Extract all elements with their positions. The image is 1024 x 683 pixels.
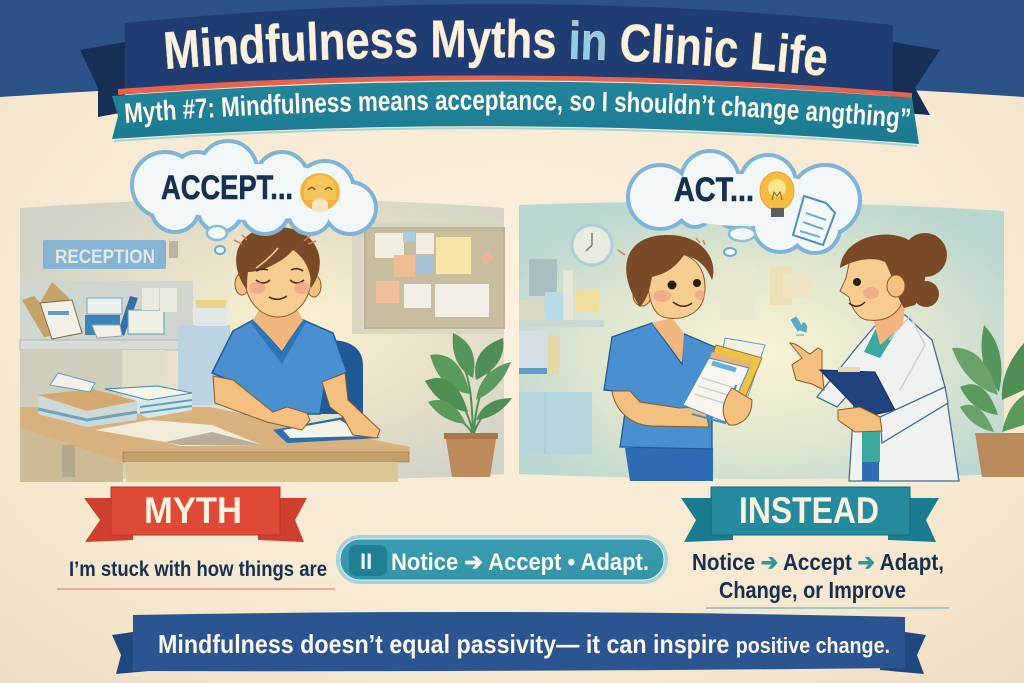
orange stripe bbox=[118, 75, 912, 98]
bottom takeaway banner bbox=[112, 612, 926, 674]
thought cloud: act bbox=[630, 153, 858, 256]
instead statement: Change, or Improve bbox=[719, 577, 906, 603]
loose papers bbox=[95, 420, 262, 446]
top blue header arch bbox=[0, 0, 1024, 97]
subtitle ribbon bbox=[112, 82, 919, 147]
title text: Mindfulness Myths in Clinic Life bbox=[165, 18, 826, 76]
eyes, blush and smile bbox=[668, 280, 676, 290]
chair bbox=[320, 340, 363, 414]
thought bubbles bbox=[207, 226, 227, 240]
plant bbox=[425, 333, 512, 477]
panel: act scene bbox=[519, 202, 1024, 481]
wall clock bbox=[572, 225, 612, 265]
eye, blush and smile bbox=[853, 278, 861, 286]
desk with paperwork bbox=[20, 373, 410, 482]
arm bbox=[612, 391, 709, 427]
icon: emoji face bbox=[300, 173, 340, 212]
files bbox=[683, 338, 765, 425]
myth ribbon bbox=[84, 487, 307, 542]
coat bbox=[817, 315, 959, 481]
myth statement: I’m stuck with how things are bbox=[69, 558, 327, 581]
neck and face bbox=[870, 305, 905, 345]
ears bbox=[235, 273, 249, 295]
nurse holding files bbox=[604, 235, 765, 481]
corkboard bbox=[352, 222, 504, 334]
face bbox=[648, 252, 705, 318]
doctor hair bbox=[840, 235, 925, 308]
thought bubbles bbox=[729, 227, 755, 241]
instead label: INSTEAD bbox=[739, 490, 879, 531]
clipboard bbox=[820, 370, 895, 417]
scrub top bbox=[212, 320, 347, 414]
center pill bbox=[336, 535, 668, 584]
act label: ACT... bbox=[674, 171, 754, 209]
face bbox=[245, 239, 311, 317]
instead ribbon bbox=[681, 487, 939, 542]
accept label: ACCEPT... bbox=[161, 169, 293, 207]
nurse with closed eyes bbox=[212, 227, 380, 438]
myth statement text: Myth #7: Mindfulness means acceptance, so I shouldn’t change angthing” bbox=[125, 91, 910, 133]
instead statement bbox=[692, 549, 949, 609]
instead statement: Notice ➔ Accept ➔ Adapt, bbox=[692, 549, 944, 575]
panel: accept scene bbox=[20, 199, 512, 482]
sleeve and holding hand bbox=[880, 387, 948, 443]
icon: light bulb bbox=[760, 172, 794, 217]
back wall shelf and files bbox=[20, 281, 230, 410]
scrub top bbox=[604, 323, 715, 449]
pants bbox=[625, 448, 713, 481]
shelves and cabinet bbox=[519, 259, 811, 454]
ear bbox=[633, 284, 651, 306]
icon: pause: II bbox=[360, 549, 372, 574]
icon: pause bbox=[349, 545, 387, 576]
icon: document bbox=[793, 196, 835, 245]
folder stack bbox=[38, 373, 192, 427]
plant bbox=[952, 325, 1024, 477]
pointing hand bbox=[790, 343, 824, 390]
reception sign bbox=[43, 240, 178, 269]
title banner bbox=[80, 4, 940, 117]
clipboard under hands bbox=[273, 417, 380, 443]
doctor in white coat bbox=[790, 233, 959, 481]
hair bun bbox=[903, 233, 947, 277]
myth label: MYTH bbox=[144, 490, 242, 531]
hair bbox=[236, 227, 320, 290]
takeaway text: Mindfulness doesn’t equal passivity— it can inspire positive change. bbox=[158, 629, 890, 659]
eyes, blush and smile bbox=[256, 269, 304, 299]
hair bbox=[626, 235, 713, 307]
reception sign: RECEPTION bbox=[55, 247, 155, 268]
sparkle marks bbox=[791, 317, 807, 335]
arms bbox=[213, 376, 310, 430]
thought cloud: accept bbox=[134, 143, 374, 254]
pill text: Notice ➔ Accept • Adapt. bbox=[391, 549, 649, 576]
